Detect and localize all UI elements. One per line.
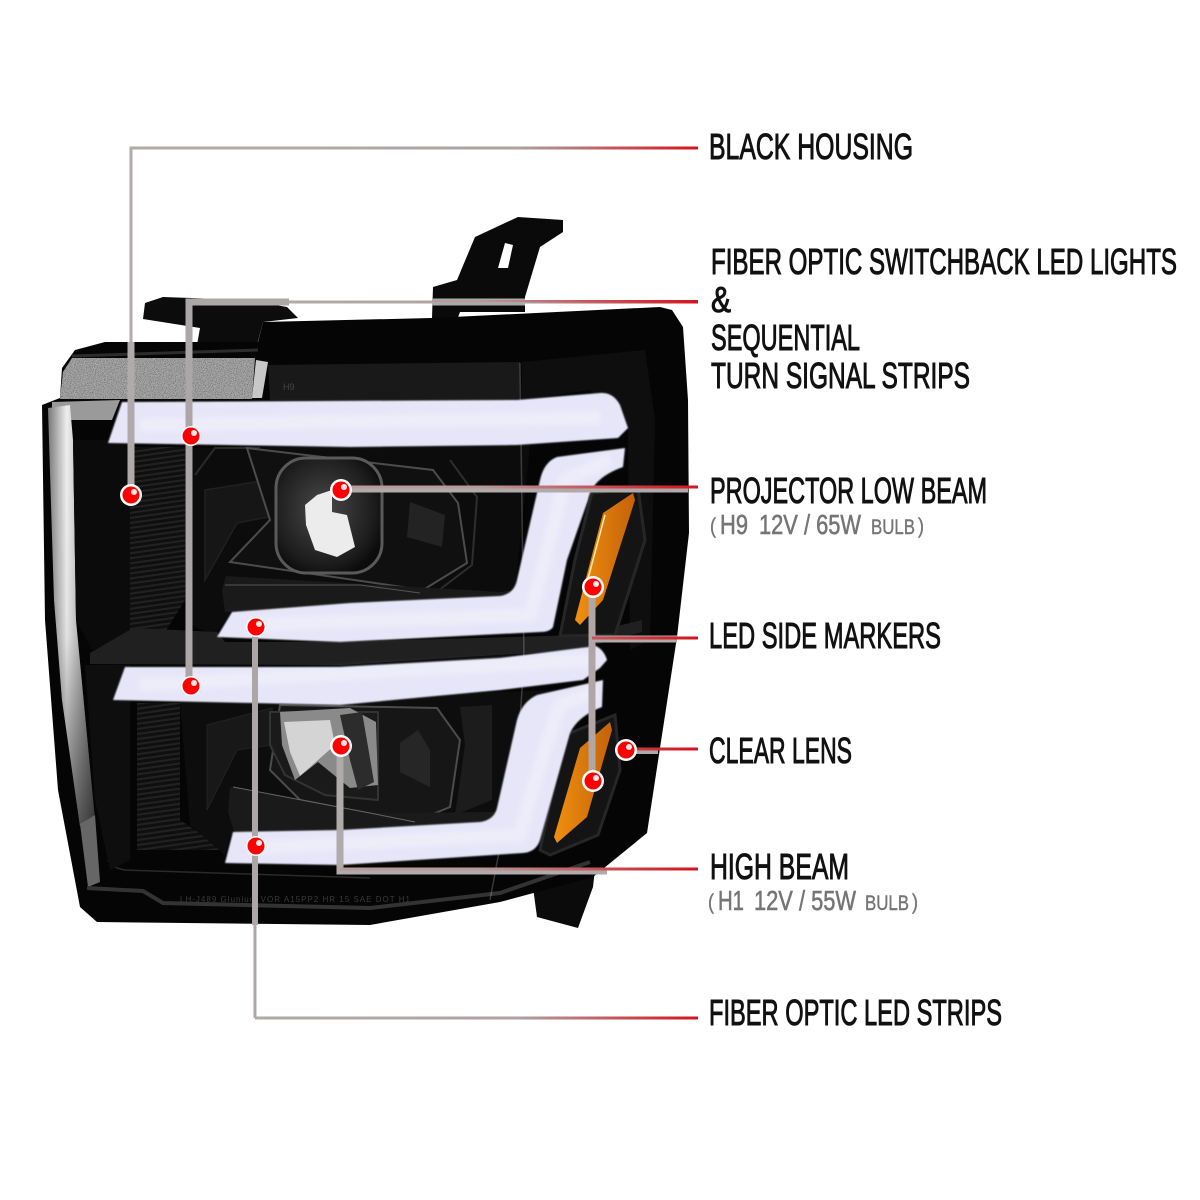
- marker 3: [181, 676, 201, 696]
- leader: fiber optic switchback: [189, 301, 698, 686]
- label: projector low beam: PROJECTOR LOW BEAM: [710, 470, 987, 511]
- leader: LED side markers: [592, 587, 698, 781]
- bulb spec: H9: H9: [720, 509, 748, 540]
- leader: clear lens: [626, 749, 698, 751]
- bulb spec: H1: ): [912, 891, 918, 914]
- upper bezel diagonal: [195, 448, 260, 475]
- marker 7: [330, 735, 352, 757]
- marker 4: [330, 479, 352, 501]
- bulb spec: H1: H1: [718, 885, 744, 916]
- bulb spec: H1: BULB: [865, 892, 909, 915]
- side marker surround: upper: [560, 488, 645, 636]
- label: fiber optic switchback: [711, 241, 1177, 396]
- lower trim band: [228, 787, 497, 835]
- marker 2: [181, 426, 201, 446]
- lower projector frame: [270, 712, 378, 800]
- mounting tab: left: [143, 297, 298, 345]
- housing body: [42, 307, 689, 925]
- leader: fiber optic LED strips: [255, 627, 698, 1018]
- chrome fade: [48, 405, 95, 826]
- bulb spec: H9: ): [918, 515, 924, 538]
- grey textured reflector strip: [60, 358, 255, 399]
- marker 1: [120, 484, 142, 506]
- headlight assembly: [42, 217, 689, 928]
- upper projector bulb: [305, 490, 355, 557]
- marker 10: [615, 739, 637, 761]
- callout markers: [120, 426, 637, 856]
- label: black housing: BLACK HOUSING: [709, 126, 913, 167]
- bulb spec: H9: (: [710, 515, 716, 538]
- chrome top reflection: [52, 400, 120, 420]
- strip highlights: [140, 418, 610, 848]
- leader: projector low beam: [341, 487, 698, 489]
- left inner panel lower: [85, 665, 130, 870]
- upper right block: [407, 502, 445, 547]
- label: projector low beam: [710, 470, 987, 540]
- bulb spec: H9: 12V / 65W: [759, 509, 861, 540]
- upper projector bezel: [190, 445, 530, 635]
- light strip 4: [225, 680, 603, 865]
- shelf divider: [90, 620, 642, 665]
- mounting bracket: top: [432, 217, 563, 320]
- label: fiber optic switchback: TURN SIGNAL STRIPS: [711, 355, 970, 396]
- glass crease: [490, 363, 524, 900]
- upper band right: [522, 350, 655, 650]
- bottom trim: [87, 862, 590, 908]
- amber side marker: upper: [575, 493, 635, 625]
- lower projector reflector: [280, 708, 378, 788]
- lower trim of upper bezel: [222, 576, 515, 612]
- lower reflector highlight: [284, 720, 335, 776]
- inner outline: [108, 860, 370, 878]
- lower projector bezel: [180, 690, 560, 855]
- label: high beam: HIGH BEAM: [710, 846, 849, 887]
- label: fiber optic switchback: SEQUENTIAL: [711, 317, 860, 358]
- leader: black housing: [131, 148, 698, 495]
- light strip 1: [108, 393, 628, 447]
- label: fiber optic switchback: &: [711, 279, 731, 320]
- bulb spec: H9: BULB: [871, 516, 915, 539]
- light strip 2: [217, 448, 625, 642]
- amber side marker: lower: [554, 722, 612, 843]
- lower trim line: [233, 787, 415, 822]
- model marking: LH-J489 Glunium VOR A15PP2 HR 15 SAE DOT H1: [180, 895, 411, 904]
- light strip 3: [113, 646, 607, 705]
- callout leader lines: [131, 148, 698, 1018]
- upper bezel thin line: [225, 585, 420, 593]
- lower reflector dark detail: [340, 712, 374, 790]
- upper octagon trim: [230, 448, 467, 590]
- label: fiber optic LED strips: FIBER OPTIC LED STRIPS: [709, 992, 1002, 1033]
- H9 marking: H9: [283, 382, 295, 392]
- bulb spec: H1: (: [708, 891, 714, 914]
- label: clear lens: CLEAR LENS: [709, 730, 852, 771]
- small clear corner: [252, 360, 268, 398]
- label: high beam: [708, 846, 918, 916]
- bulb spec: H1: 12V / 55W: [754, 885, 856, 916]
- left inner panel: [73, 440, 130, 650]
- left bezel block: [205, 480, 268, 580]
- top rim line: [72, 350, 258, 356]
- chrome left edge: [48, 405, 95, 826]
- marker 6: [246, 836, 266, 856]
- chrome bottom edge: [80, 815, 100, 887]
- ribbed panel upper: [130, 447, 185, 632]
- marker 8: [582, 576, 604, 598]
- label: LED side markers: LED SIDE MARKERS: [709, 615, 941, 656]
- lower mount: [530, 860, 596, 928]
- lower left block: [207, 708, 272, 810]
- ribbed panel lower: [137, 703, 225, 850]
- leader: high beam: [340, 746, 698, 871]
- upper outer octagon edge: [430, 460, 477, 597]
- upper projector lens: [276, 458, 382, 573]
- marker 9: [582, 770, 604, 792]
- lower right block: [400, 730, 430, 787]
- marker glint: upper: [585, 515, 605, 590]
- upper inner band: [268, 362, 520, 402]
- lower octagon trim: [270, 705, 460, 822]
- marker 5: [246, 617, 266, 637]
- side marker surround: lower: [540, 715, 620, 855]
- lower right side block: [455, 705, 492, 815]
- bulb spec: H9: [710, 509, 924, 540]
- bulb spec: H1: [708, 885, 918, 916]
